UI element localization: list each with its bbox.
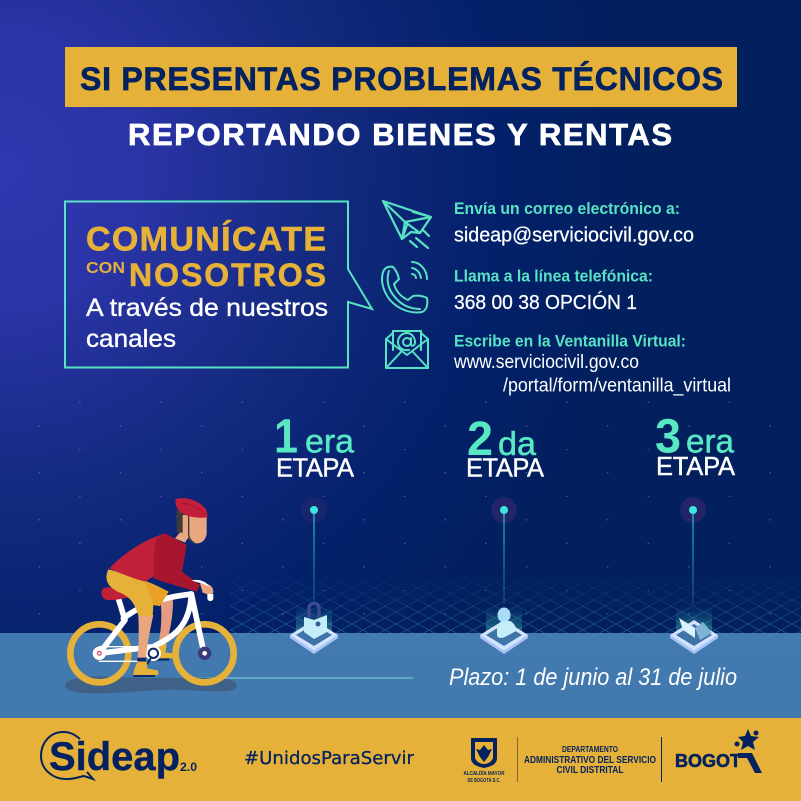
stage 3 heading: ETAPA — [656, 453, 735, 481]
heading: nosotros: NOSOTROS — [129, 257, 326, 293]
text block: email: Envía un correo electrónico a: — [454, 199, 680, 218]
hashtag: #UnidosParaServir — [244, 748, 415, 769]
text: departamento — [524, 745, 656, 776]
text: departamento: DEPARTAMENTO — [562, 745, 618, 754]
panel: speech bubble — [65, 202, 372, 368]
divider — [661, 737, 662, 782]
shorts — [106, 569, 169, 616]
stage 1 heading: ETAPA — [276, 454, 354, 482]
stage 2 heading — [466, 413, 544, 482]
stage 3 heading — [655, 410, 735, 481]
text: a traves de nuestros: A través de nuestros — [86, 294, 328, 322]
wheels — [70, 624, 128, 682]
stage 1 heading — [274, 410, 355, 482]
stage 3 heading: era — [686, 422, 735, 460]
stage 1 marker and pedestal: lock — [290, 497, 338, 654]
deadline text: Plazo: 1 de junio al 31 de julio — [449, 664, 737, 691]
subtitle: REPORTANDO BIENES Y RENTAS — [128, 117, 672, 152]
text block: phone: 368 00 38 OPCIÓN 1 — [454, 291, 637, 314]
text block: phone — [454, 266, 653, 314]
arm — [153, 533, 200, 592]
text: departamento: CIVIL DISTRITAL — [556, 764, 624, 776]
neck and head — [175, 515, 207, 543]
torso — [109, 533, 187, 582]
ground band — [0, 633, 801, 718]
ground line — [100, 678, 413, 679]
text block: phone: Llama a la línea telefónica: — [454, 266, 653, 286]
star dot grid — [0, 400, 801, 633]
footer band — [0, 718, 801, 801]
helmet — [175, 498, 208, 518]
hand — [200, 583, 213, 595]
logo: bogota: BOGOT — [675, 751, 741, 771]
near leg — [137, 615, 153, 658]
stage 1 heading: era — [305, 422, 355, 460]
logo: bogota — [675, 729, 762, 773]
title banner: SI PRESENTAS PROBLEMAS TÉCNICOS — [80, 61, 723, 97]
divider — [517, 737, 518, 782]
logo: alcaldia shield: DE BOGOTÁ D.C. — [468, 777, 501, 784]
text: canales: canales — [86, 325, 176, 353]
text block: ventanilla: /portal/form/ventanilla_virtual — [503, 376, 731, 396]
cyclist illustration — [65, 498, 237, 693]
far leg — [158, 597, 173, 644]
text block: email: sideap@serviciocivil.gov.co — [454, 224, 694, 246]
title banner — [65, 47, 737, 107]
stage 1 heading: 1 — [274, 410, 298, 464]
logo: alcaldia shield — [464, 738, 505, 784]
icon: paper plane — [383, 201, 431, 248]
icon: envelope — [386, 331, 428, 368]
icon: phone — [382, 262, 427, 312]
shadow — [65, 677, 237, 693]
logo: alcaldia shield: ALCALDÍA MAYOR — [464, 769, 505, 777]
hatch grid behind stages — [230, 580, 801, 642]
heading: comunicate: COMUNÍCATE — [86, 220, 326, 258]
stage 2 heading: da — [498, 425, 537, 462]
text block: email — [454, 199, 694, 246]
stage 2 heading: 2 — [467, 413, 493, 466]
bike frame — [99, 594, 204, 661]
logo: sideap: 2.0 — [180, 760, 197, 774]
text: departamento: ADMINISTRATIVO DEL SERVICIO — [524, 754, 656, 766]
saddle — [102, 587, 130, 600]
logo: sideap: Sideap — [49, 735, 180, 779]
stage 2 marker and pedestal: person — [480, 497, 528, 654]
stage 3 marker and pedestal: laptop — [670, 497, 718, 654]
stage 2 heading: ETAPA — [466, 454, 544, 482]
hub details — [93, 647, 106, 660]
heading: con: CON — [86, 260, 125, 277]
text block: ventanilla: www.serviciocivil.gov.co — [453, 352, 639, 373]
text block: ventanilla: Escribe en la Ventanilla Virtual: — [454, 332, 686, 350]
text block: ventanilla — [453, 332, 731, 396]
stage 3 heading: 3 — [655, 410, 681, 464]
